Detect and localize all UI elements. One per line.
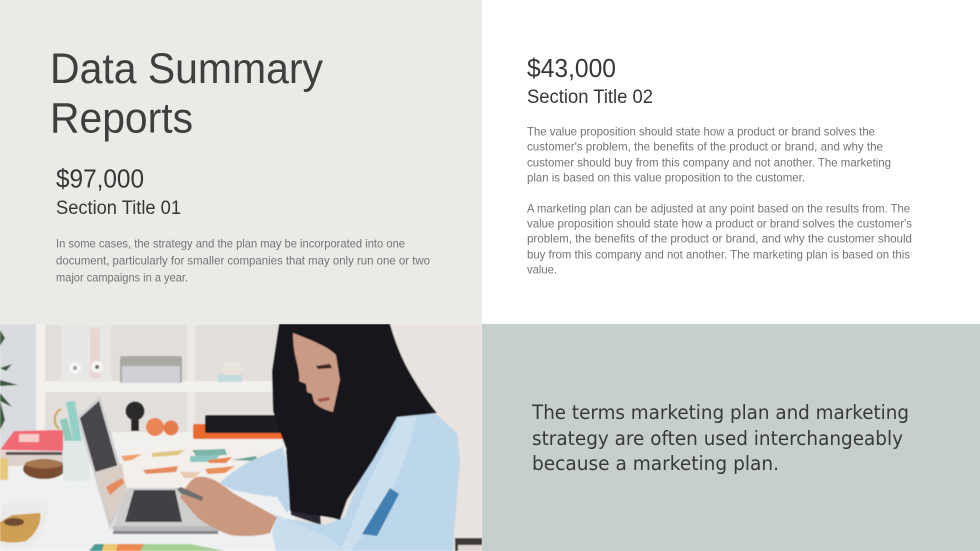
text block: section 02 first paragraph: customer should buy from this company and not another. The marketing <box>527 156 891 170</box>
wooden bowl <box>23 459 65 479</box>
figure: $97,000: $97,000 <box>56 164 144 194</box>
panel: title and section 01 <box>0 0 482 324</box>
text block: quote <box>531 401 909 475</box>
laptop base <box>112 488 219 534</box>
text block: section 02 second paragraph: buy from this company and not another. The marketing plan is based on this <box>527 248 910 262</box>
pink notebook stack <box>0 430 63 480</box>
heading: Section Title 02: Section Title 02 <box>527 87 653 108</box>
text block: section 02 second paragraph: value. <box>527 262 557 276</box>
text block: section 02 second paragraph <box>527 202 912 276</box>
text block: quote: The terms marketing plan and marketing <box>531 401 909 424</box>
face <box>293 333 340 412</box>
text block: section 02 first paragraph: customer's problem, the benefits of the product or brand, and why the <box>527 140 883 154</box>
text block: section 02 second paragraph: problem, the benefits of the product or brand, and why the customer should <box>527 232 912 246</box>
globe <box>126 402 144 431</box>
panel: quote <box>482 324 980 551</box>
hands and phone <box>177 477 277 536</box>
text block: section 02 first paragraph <box>527 124 891 184</box>
laptop screen <box>77 396 128 530</box>
heading: Section Title 01: Section Title 01 <box>56 198 181 219</box>
pen cup <box>55 401 90 481</box>
glass bowl of snacks <box>0 512 42 544</box>
text block: section 01 body: major campaigns in a year. <box>56 270 188 284</box>
color swatch booklet <box>89 544 225 551</box>
blazer sleeve left <box>220 447 295 513</box>
text block: section 02 second paragraph: value proposition should state how a product or brand solves the customer's <box>527 216 912 230</box>
text block: section 02 second paragraph: A marketing plan can be adjusted at any point based on the results from. The <box>527 202 910 216</box>
blazer body <box>273 412 460 551</box>
text block: quote: because a marketing plan. <box>532 452 779 475</box>
shelving unit <box>36 324 281 449</box>
photo: woman at desk with laptop and phone <box>0 324 482 551</box>
panel: section 02 <box>482 0 980 324</box>
plant <box>0 330 18 430</box>
text block: section 01 body <box>56 236 430 284</box>
text block: section 01 body: document, particularly for smaller companies that may only run one or two <box>56 254 430 268</box>
back wall <box>282 324 482 551</box>
title: Reports <box>50 94 193 142</box>
planner paper <box>110 444 282 490</box>
title: Data Summary <box>50 45 323 93</box>
hair <box>272 324 437 520</box>
left wall <box>0 324 38 449</box>
figure: $43,000: $43,000 <box>527 53 616 83</box>
shelf items <box>61 324 111 382</box>
right side chair <box>455 538 482 551</box>
text block: section 02 first paragraph: The value proposition should state how a product or brand solves the <box>527 124 875 138</box>
dark shadow under hair <box>286 450 321 525</box>
title <box>50 45 323 142</box>
text block: quote: strategy are often used interchangeably <box>532 427 903 450</box>
orange tray and black folder <box>193 424 285 439</box>
text block: section 01 body: In some cases, the strategy and the plan may be incorporated into one <box>56 236 405 250</box>
desk <box>0 443 300 551</box>
sticky notes <box>192 449 227 456</box>
text block: section 02 first paragraph: plan is based on this value proposition to the customer. <box>527 170 805 184</box>
